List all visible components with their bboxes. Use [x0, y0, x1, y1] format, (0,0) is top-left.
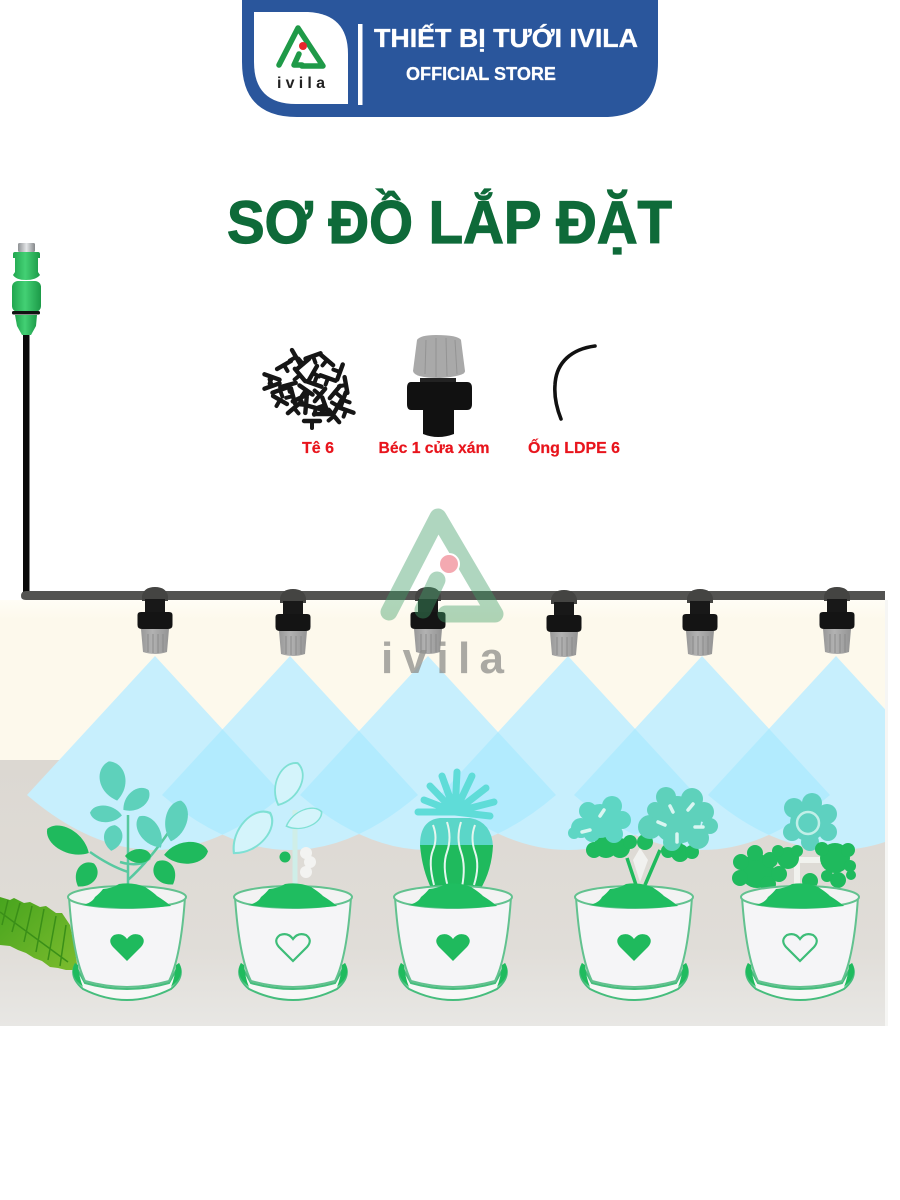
cactus top in spray [420, 818, 493, 847]
lower leaves [586, 834, 699, 862]
cactus body on floor [420, 845, 493, 890]
icon: curved black tube [555, 346, 595, 419]
label: nozzle: Béc 1 cửa xám [378, 440, 490, 457]
nozzle 4 [546, 590, 582, 657]
plant 3: cactus [418, 772, 494, 890]
cactus ribs [431, 822, 477, 887]
label: pipe: Ống LDPE 6 [528, 437, 620, 457]
watermark mark [389, 517, 495, 614]
logo tile [254, 12, 348, 104]
spray overlaps [162, 729, 830, 835]
o-ring [12, 311, 40, 314]
nozzle 2 [276, 589, 310, 656]
parts list [262, 335, 620, 457]
nozzle 3 [410, 587, 446, 654]
barb tip [15, 315, 37, 335]
header banner [242, 0, 658, 117]
main horizontal pipe [21, 591, 885, 600]
flower petals [783, 793, 837, 851]
label: tee: Tê 6 [302, 440, 334, 457]
pot 2 [234, 883, 352, 1000]
title: SƠ ĐỒ LẮP ĐẶT [227, 189, 672, 256]
watermark wordmark: ivila [381, 634, 505, 683]
right flower [638, 787, 718, 851]
official store label: OFFICIAL STORE [406, 63, 556, 84]
pot 3 [394, 883, 512, 1000]
stems [90, 815, 170, 885]
clover leaves [732, 842, 856, 892]
mist nozzles [138, 587, 854, 657]
plant 1: leafy stem [41, 759, 209, 892]
scene background [0, 600, 885, 1026]
plant 2: outlined seedling [224, 758, 325, 885]
watermark dot [439, 554, 459, 574]
heart 1 [110, 934, 144, 961]
heart 5 [783, 934, 817, 961]
green bud [280, 852, 290, 862]
spray fan bodies [27, 656, 900, 850]
outline leaves [224, 758, 325, 862]
banner separator [358, 24, 362, 105]
pot 4 [575, 883, 693, 1000]
cactus flower [418, 772, 494, 816]
hose connector [12, 243, 41, 335]
water spray fans [27, 656, 900, 850]
plant 4: twin flowers [568, 787, 718, 885]
vertical black pipe [23, 335, 30, 593]
fern leaf [0, 897, 78, 970]
metal cap [18, 243, 35, 252]
right edge fade [885, 600, 888, 1026]
upper nut [13, 252, 40, 280]
store name: THIẾT BỊ TƯỚI IVILA [374, 23, 638, 53]
logo wordmark: ivila [277, 75, 325, 92]
flower ring [797, 812, 819, 834]
part: tee fittings [262, 350, 354, 457]
icon: pile of tee connectors [262, 350, 354, 428]
pot 1 [68, 883, 186, 1000]
stem [292, 810, 298, 885]
pale stem [775, 860, 830, 885]
nozzle 6 [820, 587, 854, 654]
lower body [12, 281, 41, 312]
gray floor [0, 760, 885, 1026]
part: LDPE pipe [528, 346, 620, 457]
stems [627, 850, 660, 885]
heart 3 [436, 934, 470, 961]
part: nozzle [378, 335, 490, 457]
nozzle 1 [138, 587, 172, 654]
logo red dot [299, 42, 307, 50]
white blossom [300, 847, 316, 878]
pots row [68, 883, 859, 1000]
icon: gray mist nozzle [407, 335, 472, 437]
heart 2 [276, 934, 310, 961]
lower leaves on floor [41, 819, 209, 892]
logo mark [279, 28, 323, 66]
upper leaves in spray [89, 759, 192, 853]
plant 5: round flower and clover [732, 793, 856, 892]
left flower [568, 796, 631, 843]
petal marks [582, 804, 703, 842]
banner background [242, 0, 658, 117]
pot 5 [741, 883, 859, 1000]
nozzle 5 [682, 589, 718, 656]
watermark logo [381, 517, 505, 683]
white gap between stems [633, 848, 648, 882]
cream wall [0, 600, 885, 762]
heart 4 [617, 934, 651, 961]
